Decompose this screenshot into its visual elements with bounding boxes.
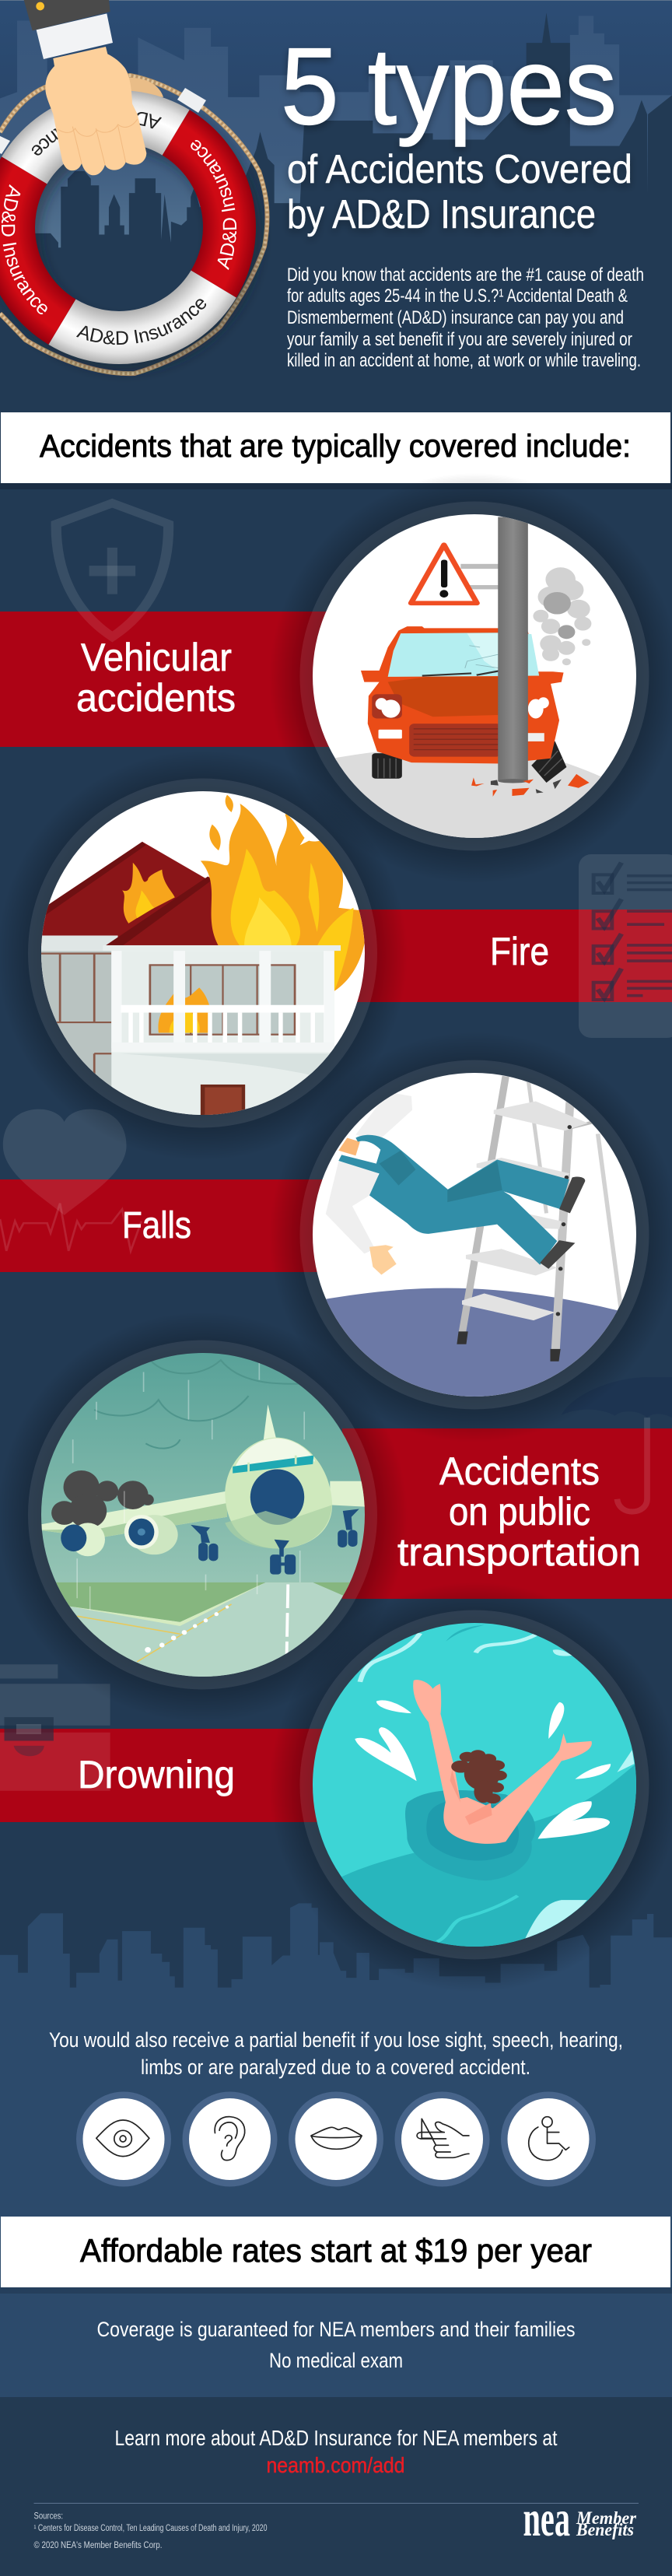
sources and copyright: ¹ Centers for Disease Control, Ten Leading Causes of Death and Injury, 2020 bbox=[34, 2524, 268, 2533]
watermark: umbrella bbox=[562, 1377, 672, 1512]
illustration: car crashed into a pole bbox=[313, 514, 636, 838]
watermark: checklist bbox=[579, 854, 672, 1038]
red band: public transportation bbox=[342, 1428, 672, 1599]
title: of Accidents Covered bbox=[287, 147, 632, 192]
icon: eye bbox=[76, 2091, 171, 2186]
heading bar: affordable rates bbox=[0, 2217, 672, 2294]
call to action bbox=[115, 2426, 558, 2477]
circle frame shadows and rings bbox=[0, 473, 672, 1992]
illustration: hand holding life ring bbox=[0, 0, 269, 377]
life ring labels: AD&D Insurance bbox=[76, 299, 206, 345]
watermark: shield bbox=[56, 503, 169, 637]
rope around life ring bbox=[0, 75, 268, 373]
watermark: heart with pulse line bbox=[0, 1109, 142, 1251]
life ring segments bbox=[9, 117, 229, 338]
icon: wheelchair bbox=[501, 2091, 596, 2186]
red band: falls bbox=[0, 1179, 334, 1272]
title: by AD&D Insurance bbox=[287, 192, 596, 237]
title: 5 types bbox=[281, 25, 617, 147]
icon: lips bbox=[289, 2091, 383, 2186]
lower section background with skyline bbox=[0, 1903, 672, 2397]
logo: NEA Member Benefits: nea bbox=[523, 2490, 570, 2547]
heading bar: affordable rates: Affordable rates start at $19 per year bbox=[80, 2232, 592, 2269]
partial benefit text: limbs or are paralyzed due to a covered accident. bbox=[141, 2056, 530, 2079]
label: fire: Fire bbox=[490, 930, 549, 973]
label: accidents on public transportation bbox=[397, 1449, 641, 1574]
icon: ear bbox=[182, 2091, 277, 2186]
label: accidents on public transportation: Accidents bbox=[439, 1449, 600, 1493]
heading bar: accidents covered bbox=[0, 412, 672, 489]
coverage text bbox=[96, 2318, 576, 2372]
title bbox=[281, 25, 632, 237]
watermark: briefcase bbox=[0, 1664, 110, 1791]
label: vehicular accidents bbox=[76, 636, 236, 720]
hand and sleeve bbox=[24, 0, 146, 175]
illustration: burning house bbox=[31, 786, 373, 1120]
red band: drowning bbox=[0, 1729, 334, 1822]
sources and copyright: © 2020 NEA's Member Benefits Corp. bbox=[34, 2541, 162, 2550]
label: drowning: Drowning bbox=[78, 1753, 235, 1796]
label: vehicular accidents: accidents bbox=[76, 676, 236, 720]
red band: fire bbox=[342, 909, 672, 1002]
illustration: worker falling from a ladder bbox=[313, 1073, 636, 1397]
partial benefit text bbox=[49, 2028, 623, 2079]
sources and copyright bbox=[34, 2511, 268, 2550]
heading bar: accidents covered: Accidents that are typically covered include: bbox=[40, 428, 631, 464]
icon row: partial benefit conditions bbox=[76, 2091, 596, 2186]
sources and copyright: Sources: bbox=[34, 2511, 63, 2521]
footer panel bbox=[0, 2397, 672, 2576]
label: falls: Falls bbox=[122, 1205, 191, 1246]
coverage text: No medical exam bbox=[269, 2349, 403, 2372]
call to action: Learn more about AD&D Insurance for NEA members at bbox=[115, 2426, 558, 2450]
life ring labels: AD&D Insurance bbox=[32, 112, 162, 156]
label: accidents on public transportation: on public bbox=[449, 1490, 590, 1533]
red band: vehicular bbox=[0, 612, 334, 747]
logo: NEA Member Benefits bbox=[523, 2490, 637, 2547]
logo: NEA Member Benefits: Benefits bbox=[576, 2520, 634, 2539]
label: vehicular accidents: Vehicular bbox=[81, 636, 232, 679]
icon: hand with missing finger bbox=[395, 2091, 490, 2186]
logo: NEA Member Benefits: Member bbox=[576, 2508, 637, 2528]
life ring labels: AD&D Insurance bbox=[191, 140, 236, 271]
header background with city skyline bbox=[0, 0, 672, 267]
life ring labels bbox=[2, 112, 236, 345]
label: accidents on public transportation: transportation bbox=[397, 1530, 641, 1574]
intro paragraph bbox=[287, 265, 644, 371]
coverage text: Coverage is guaranteed for NEA members and their families bbox=[96, 2318, 576, 2341]
call to action: neamb.com/add bbox=[266, 2453, 404, 2477]
illustration: person drowning bbox=[313, 1623, 636, 1947]
illustration: airplane landing in a storm bbox=[34, 1350, 377, 1681]
